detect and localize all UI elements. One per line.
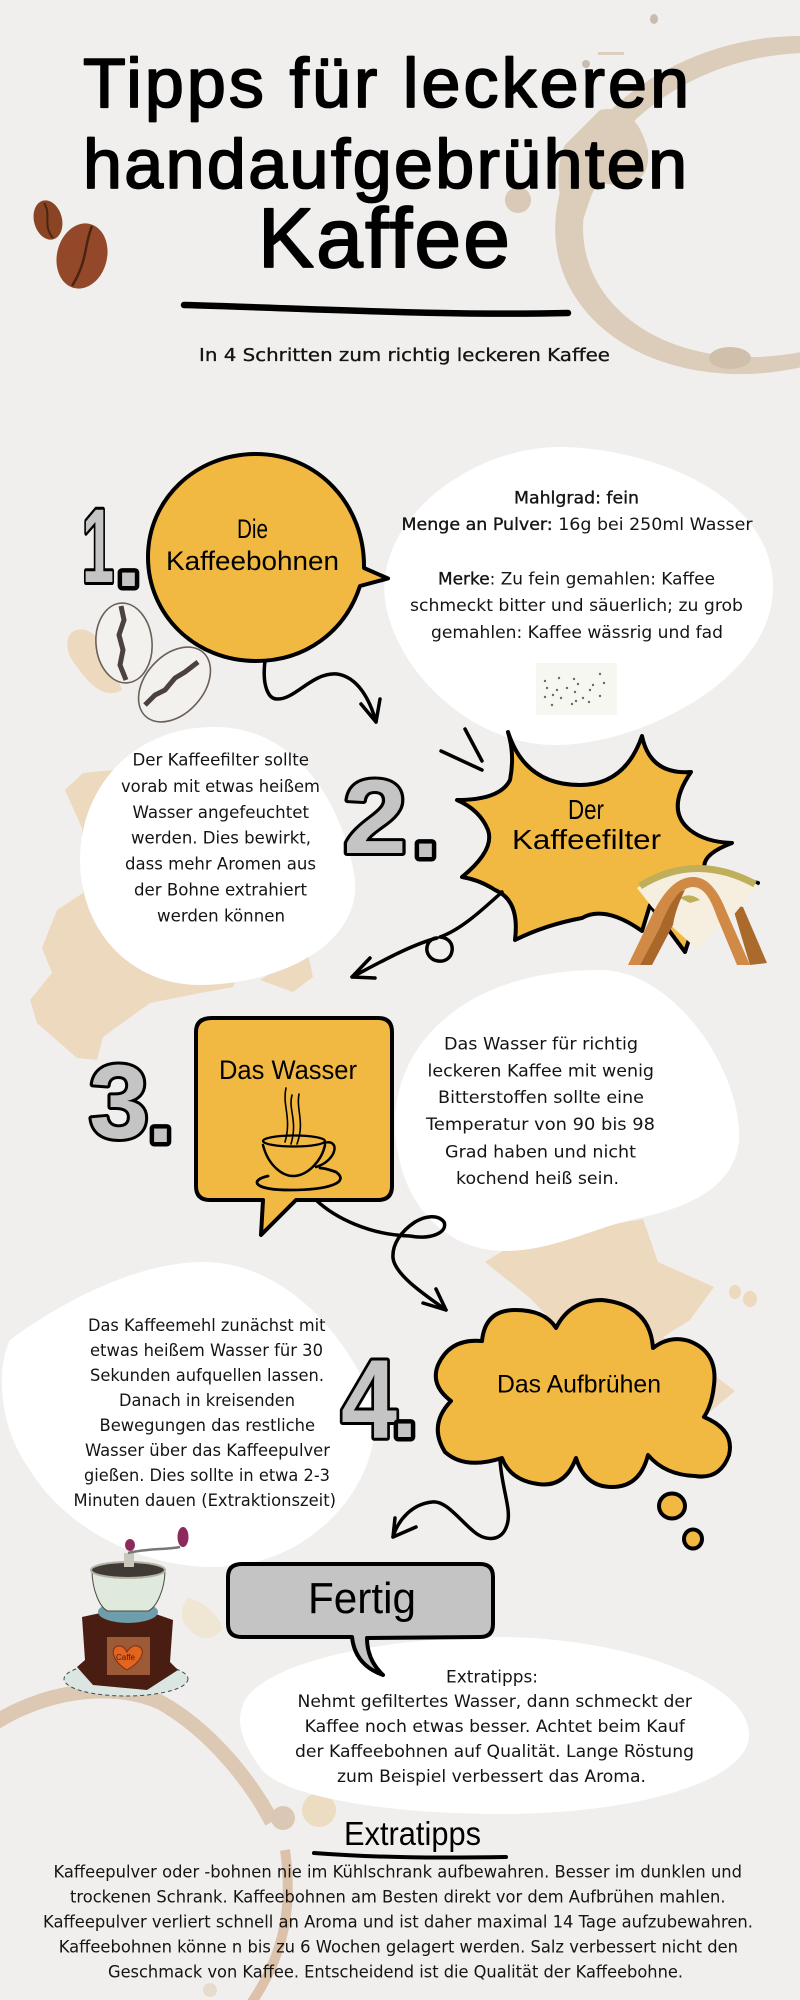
title: handaufgebrühten	[83, 125, 687, 203]
step 3 text: Bitterstoffen sollte eine	[438, 1088, 644, 1107]
step 3 text	[425, 1035, 655, 1188]
stain behind green beans	[67, 629, 122, 693]
icon: steaming coffee cup	[257, 1088, 340, 1190]
heading: Der Kaffeefilter	[512, 794, 661, 855]
thought dots	[659, 1494, 702, 1548]
step 3 text: Das Wasser für richtig	[444, 1035, 638, 1054]
number 3: 3	[89, 1044, 149, 1161]
arrow: step 2 to step 3	[352, 892, 502, 978]
finish text: Nehmt gefiltertes Wasser, dann schmeckt der	[298, 1692, 692, 1711]
panel: step 1 heading bubble	[148, 454, 388, 661]
bottom tips text: Kaffeepulver verliert schnell an Aroma und ist daher maximal 14 Tage aufzubewahren.	[43, 1913, 753, 1932]
step 3 text: kochend heiß sein.	[456, 1169, 619, 1188]
heading: Das Wasser: Das Wasser	[219, 1055, 357, 1085]
title	[83, 44, 689, 285]
heading: Die Kaffeebohnen: Kaffeebohnen	[166, 546, 339, 576]
title: Kaffee	[258, 191, 510, 285]
step 2 text: Wasser angefeuchtet	[132, 803, 310, 822]
step 1 text: gemahlen: Kaffee wässrig und fad	[431, 623, 723, 642]
finish text	[295, 1668, 694, 1786]
step 1 text: schmeckt bitter und säuerlich; zu grob	[410, 596, 743, 615]
heading underline	[314, 1853, 506, 1858]
panel: finish text bubble	[240, 1637, 749, 1814]
step 4 text: Bewegungen das restliche	[100, 1416, 315, 1435]
icon: green coffee beans	[93, 601, 225, 736]
step 2 text: vorab mit etwas heißem	[121, 777, 320, 796]
finish text: Extratipps:	[446, 1668, 538, 1687]
step 2 text: werden. Dies bewirkt,	[131, 829, 311, 848]
heading: Das Aufbrühen: Das Aufbrühen	[497, 1370, 661, 1398]
arrow: step 4 to finish	[393, 1460, 508, 1538]
number 4: 4	[341, 1337, 397, 1462]
panel: step 3 heading box	[196, 1018, 392, 1235]
step 2 text: der Bohne extrahiert	[134, 881, 308, 900]
step 2 text: werden können	[157, 906, 285, 925]
step 2 text	[121, 751, 320, 925]
number 4: .	[392, 1357, 417, 1457]
panel: step 2 starburst	[441, 729, 758, 952]
icon: coffee grounds	[536, 663, 617, 715]
step 1 text: Mahlgrad: fein	[514, 488, 639, 508]
heading: Die Kaffeebohnen	[166, 514, 339, 576]
step 4 text: Minuten dauen (Extraktionszeit)	[74, 1491, 336, 1510]
heading: Der Kaffeefilter: Kaffeefilter	[512, 824, 661, 855]
finish text: zum Beispiel verbessert das Aroma.	[337, 1767, 646, 1786]
finish text: Kaffee noch etwas besser. Achtet beim Kauf	[305, 1717, 686, 1736]
number 2	[343, 759, 438, 877]
icon: roasted coffee beans	[29, 197, 114, 294]
step 3 text: leckeren Kaffee mit wenig	[428, 1061, 654, 1080]
subtitle: In 4 Schritten zum richtig leckeren Kaffee	[199, 345, 610, 366]
icon: coffee grinder: Caffe	[116, 1653, 136, 1662]
step 1 text: Merke: Zu fein gemahlen: Kaffee	[438, 570, 715, 588]
arrow: step 3 to step 4	[316, 1200, 446, 1310]
icon: coffee grinder	[64, 1527, 188, 1696]
step 2 text: Der Kaffeefilter sollte	[132, 751, 309, 770]
panel: step 4 text bubble	[2, 1262, 375, 1567]
step 1 text: Menge an Pulver: 16g bei 250ml Wasser	[402, 515, 753, 534]
title underline	[184, 305, 568, 314]
panel: step 4 cloud	[436, 1300, 730, 1548]
panel: step 2 text bubble	[80, 727, 355, 985]
bottom tips text: Kaffeebohnen könne n bis zu 6 Wochen gelagert werden. Salz verbessert nicht den	[59, 1938, 738, 1957]
panel: step 1 text bubble	[384, 447, 773, 745]
bottom tips text: Kaffeepulver oder -bohnen nie im Kühlschrank aufbewahren. Besser im dunklen und	[54, 1863, 742, 1882]
number 3: .	[148, 1062, 173, 1162]
number 3	[89, 1044, 173, 1162]
icon: coffee filter on stand	[628, 867, 767, 965]
step 4 text: gießen. Dies sollte in etwa 2-3	[84, 1466, 330, 1485]
stain near grinder	[182, 1598, 223, 1638]
arrow: step 1 to step 2	[264, 661, 380, 722]
step 1 text	[402, 488, 753, 642]
panel: step 3 text bubble	[395, 970, 739, 1251]
heading: Extratipps: Extratipps	[344, 1815, 481, 1852]
heading: Die Kaffeebohnen: Die	[237, 514, 268, 544]
step 4 text: Das Kaffeemehl zunächst mit	[88, 1316, 326, 1335]
step 3 text: Temperatur von 90 bis 98	[425, 1115, 655, 1134]
coffee stain left	[30, 770, 313, 1060]
bottom tips text: Geschmack von Kaffee. Entscheidend ist die Qualität der Kaffeebohne.	[108, 1963, 683, 1982]
coffee ring stain top right	[505, 0, 800, 421]
number 1: .	[116, 506, 141, 606]
bottom tips text: trockenen Schrank. Kaffeebohnen am Besten direkt vor dem Aufbrühen mahlen.	[70, 1888, 726, 1907]
emphasis strokes	[441, 729, 482, 770]
number 1: 1	[82, 488, 114, 605]
finish text: der Kaffeebohnen auf Qualität. Lange Röstung	[295, 1742, 694, 1761]
step 2 text: dass mehr Aromen aus	[125, 855, 316, 874]
number 2: .	[413, 777, 438, 877]
step 3 text: Grad haben und nicht	[445, 1142, 637, 1162]
step 4 text: Wasser über das Kaffeepulver	[85, 1441, 330, 1460]
number 2: 2	[343, 759, 407, 876]
bottom tips text	[43, 1863, 753, 1982]
step 4 text: Danach in kreisenden	[119, 1391, 295, 1410]
step 4 text	[74, 1316, 336, 1510]
panel: Fertig box	[228, 1564, 493, 1675]
heading: Der Kaffeefilter: Der	[568, 794, 604, 825]
step 4 text: etwas heißem Wasser für 30	[90, 1341, 323, 1360]
heading: Fertig: Fertig	[308, 1574, 416, 1623]
coffee stain center right	[485, 1219, 757, 1420]
title: Tipps für leckeren	[83, 44, 689, 122]
coffee ring stain bottom left	[0, 1691, 336, 2000]
step 4 text: Sekunden aufquellen lassen.	[90, 1366, 324, 1385]
